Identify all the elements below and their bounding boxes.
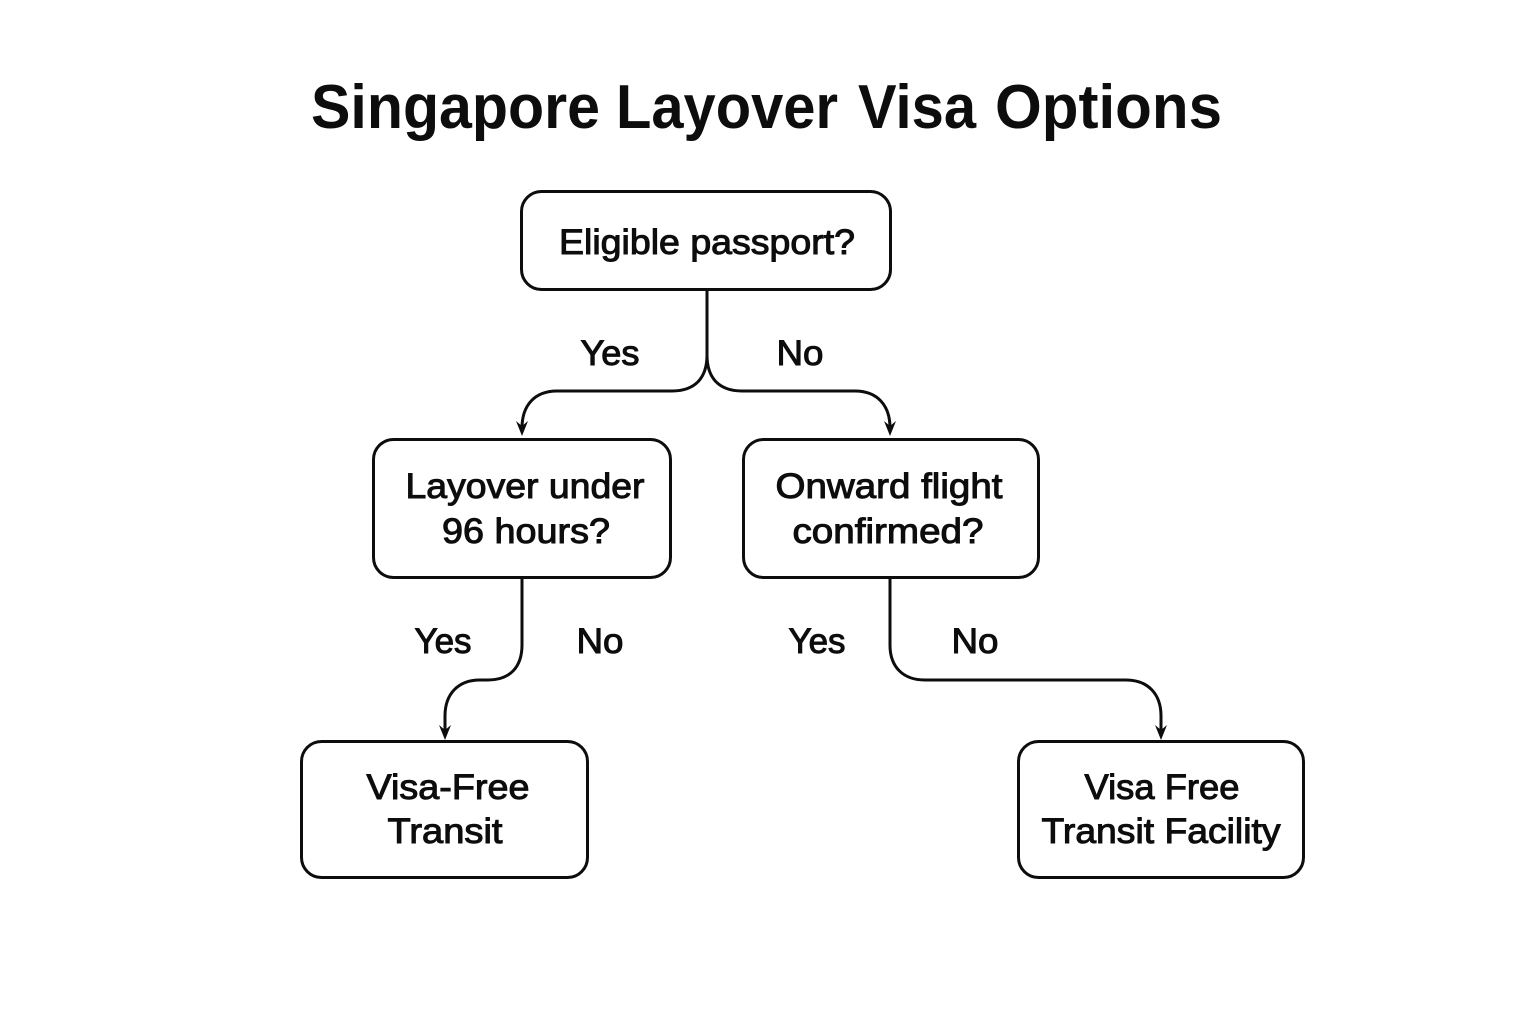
node: visa free transit facility: Visa Free [1084,768,1240,807]
title: Singapore [311,73,600,142]
title: Visa [858,73,976,142]
arrow: passport yes [516,290,707,436]
title: Options [995,73,1222,142]
label: yes: Yes [788,622,846,661]
node: visa-free transit: Visa-Free [366,768,530,807]
node: layover under 96 hours: Layover under [406,467,645,506]
node: onward flight confirmed: Onward flight [776,467,1003,506]
arrow: passport no [707,355,896,436]
arrow: layover to visa-free transit [439,578,522,740]
label: no: No [776,334,824,373]
node: visa free transit facility [1018,742,1304,878]
node: layover under 96 hours: 96 hours? [442,512,610,551]
label: yes: Yes [580,334,640,373]
title: Layover [616,73,838,142]
node: visa-free transit [302,742,588,878]
arrow: onward flight to transit facility [890,578,1167,740]
node: onward flight confirmed: confirmed? [792,512,984,551]
node: visa-free transit: Transit [388,812,503,851]
node: visa free transit facility: Transit Facility [1042,812,1281,851]
node: onward flight confirmed [744,440,1038,578]
node: eligible passport [522,192,890,290]
label: yes: Yes [414,622,472,661]
node: layover under 96 hours [374,440,670,578]
label: no: No [952,622,998,661]
label: no: No [576,622,624,661]
node: eligible passport: Eligible passport? [559,223,855,262]
